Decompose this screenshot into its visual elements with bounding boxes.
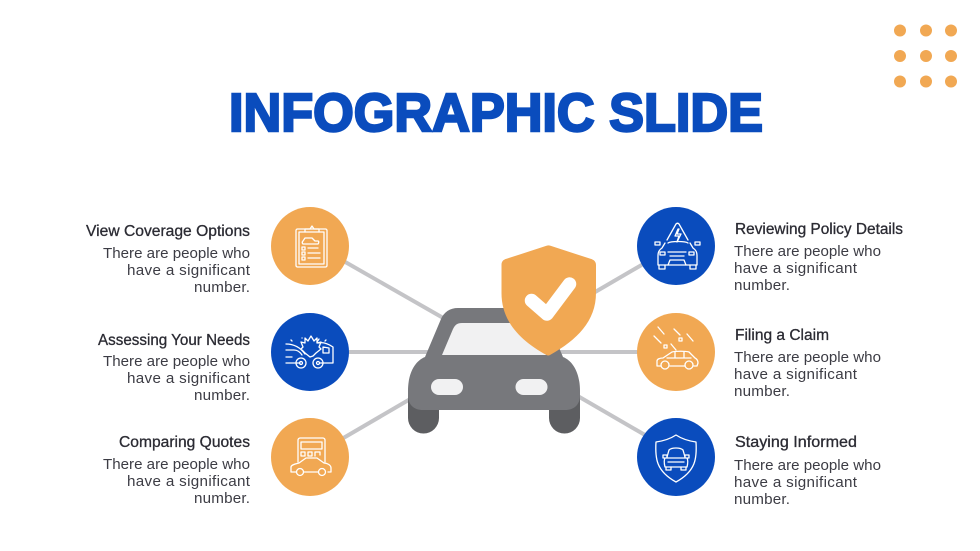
description: number.: [194, 387, 250, 404]
description: have a significant: [127, 262, 251, 279]
description: There are people who: [734, 243, 881, 260]
description: have a significant: [734, 260, 858, 277]
item: Filing a Claim: [637, 313, 881, 400]
description: number.: [734, 383, 790, 400]
item: Staying Informed: [637, 418, 881, 508]
description: [103, 245, 251, 296]
title: INFOGRAPHIC SLIDE: [229, 84, 763, 143]
car headlights: [431, 379, 548, 395]
circle icon: shield with car: [637, 418, 715, 496]
description: have a significant: [734, 366, 858, 383]
heading: Comparing Quotes: [119, 434, 250, 451]
heading: Assessing Your Needs: [98, 332, 250, 349]
circle icon: clipboard: [271, 207, 349, 285]
circle icon: car in hail: [637, 313, 715, 391]
circle icon: electric car: [637, 207, 715, 285]
heading: Reviewing Policy Details: [735, 221, 903, 238]
circle icon: calculator and car: [271, 418, 349, 496]
shield with check mark: [502, 245, 596, 356]
description: [734, 243, 881, 294]
description: [734, 457, 881, 508]
item: View Coverage Options: [86, 207, 349, 296]
connector lines: [340, 259, 645, 440]
item: Comparing Quotes: [103, 418, 349, 507]
heading: View Coverage Options: [86, 223, 250, 240]
item: Assessing Your Needs: [98, 313, 349, 404]
car body: [408, 308, 580, 410]
central car illustration: [408, 308, 580, 434]
description: [103, 456, 251, 507]
description: There are people who: [103, 245, 250, 262]
circle icon: car collision: [271, 313, 349, 391]
description: number.: [194, 490, 250, 507]
description: There are people who: [103, 353, 250, 370]
description: number.: [734, 491, 790, 508]
description: have a significant: [127, 473, 251, 490]
description: [103, 353, 251, 404]
description: have a significant: [734, 474, 858, 491]
description: There are people who: [734, 457, 881, 474]
heading: Staying Informed: [735, 434, 857, 451]
description: have a significant: [127, 370, 251, 387]
car windshield: [442, 323, 546, 355]
description: There are people who: [734, 349, 881, 366]
car wheels: [408, 395, 580, 434]
description: number.: [194, 279, 250, 296]
item: Reviewing Policy Details: [637, 207, 903, 294]
description: There are people who: [103, 456, 250, 473]
description: [734, 349, 881, 400]
description: number.: [734, 277, 790, 294]
heading: Filing a Claim: [735, 327, 829, 344]
check mark: [532, 284, 570, 314]
decorative dot grid: [894, 24, 957, 88]
